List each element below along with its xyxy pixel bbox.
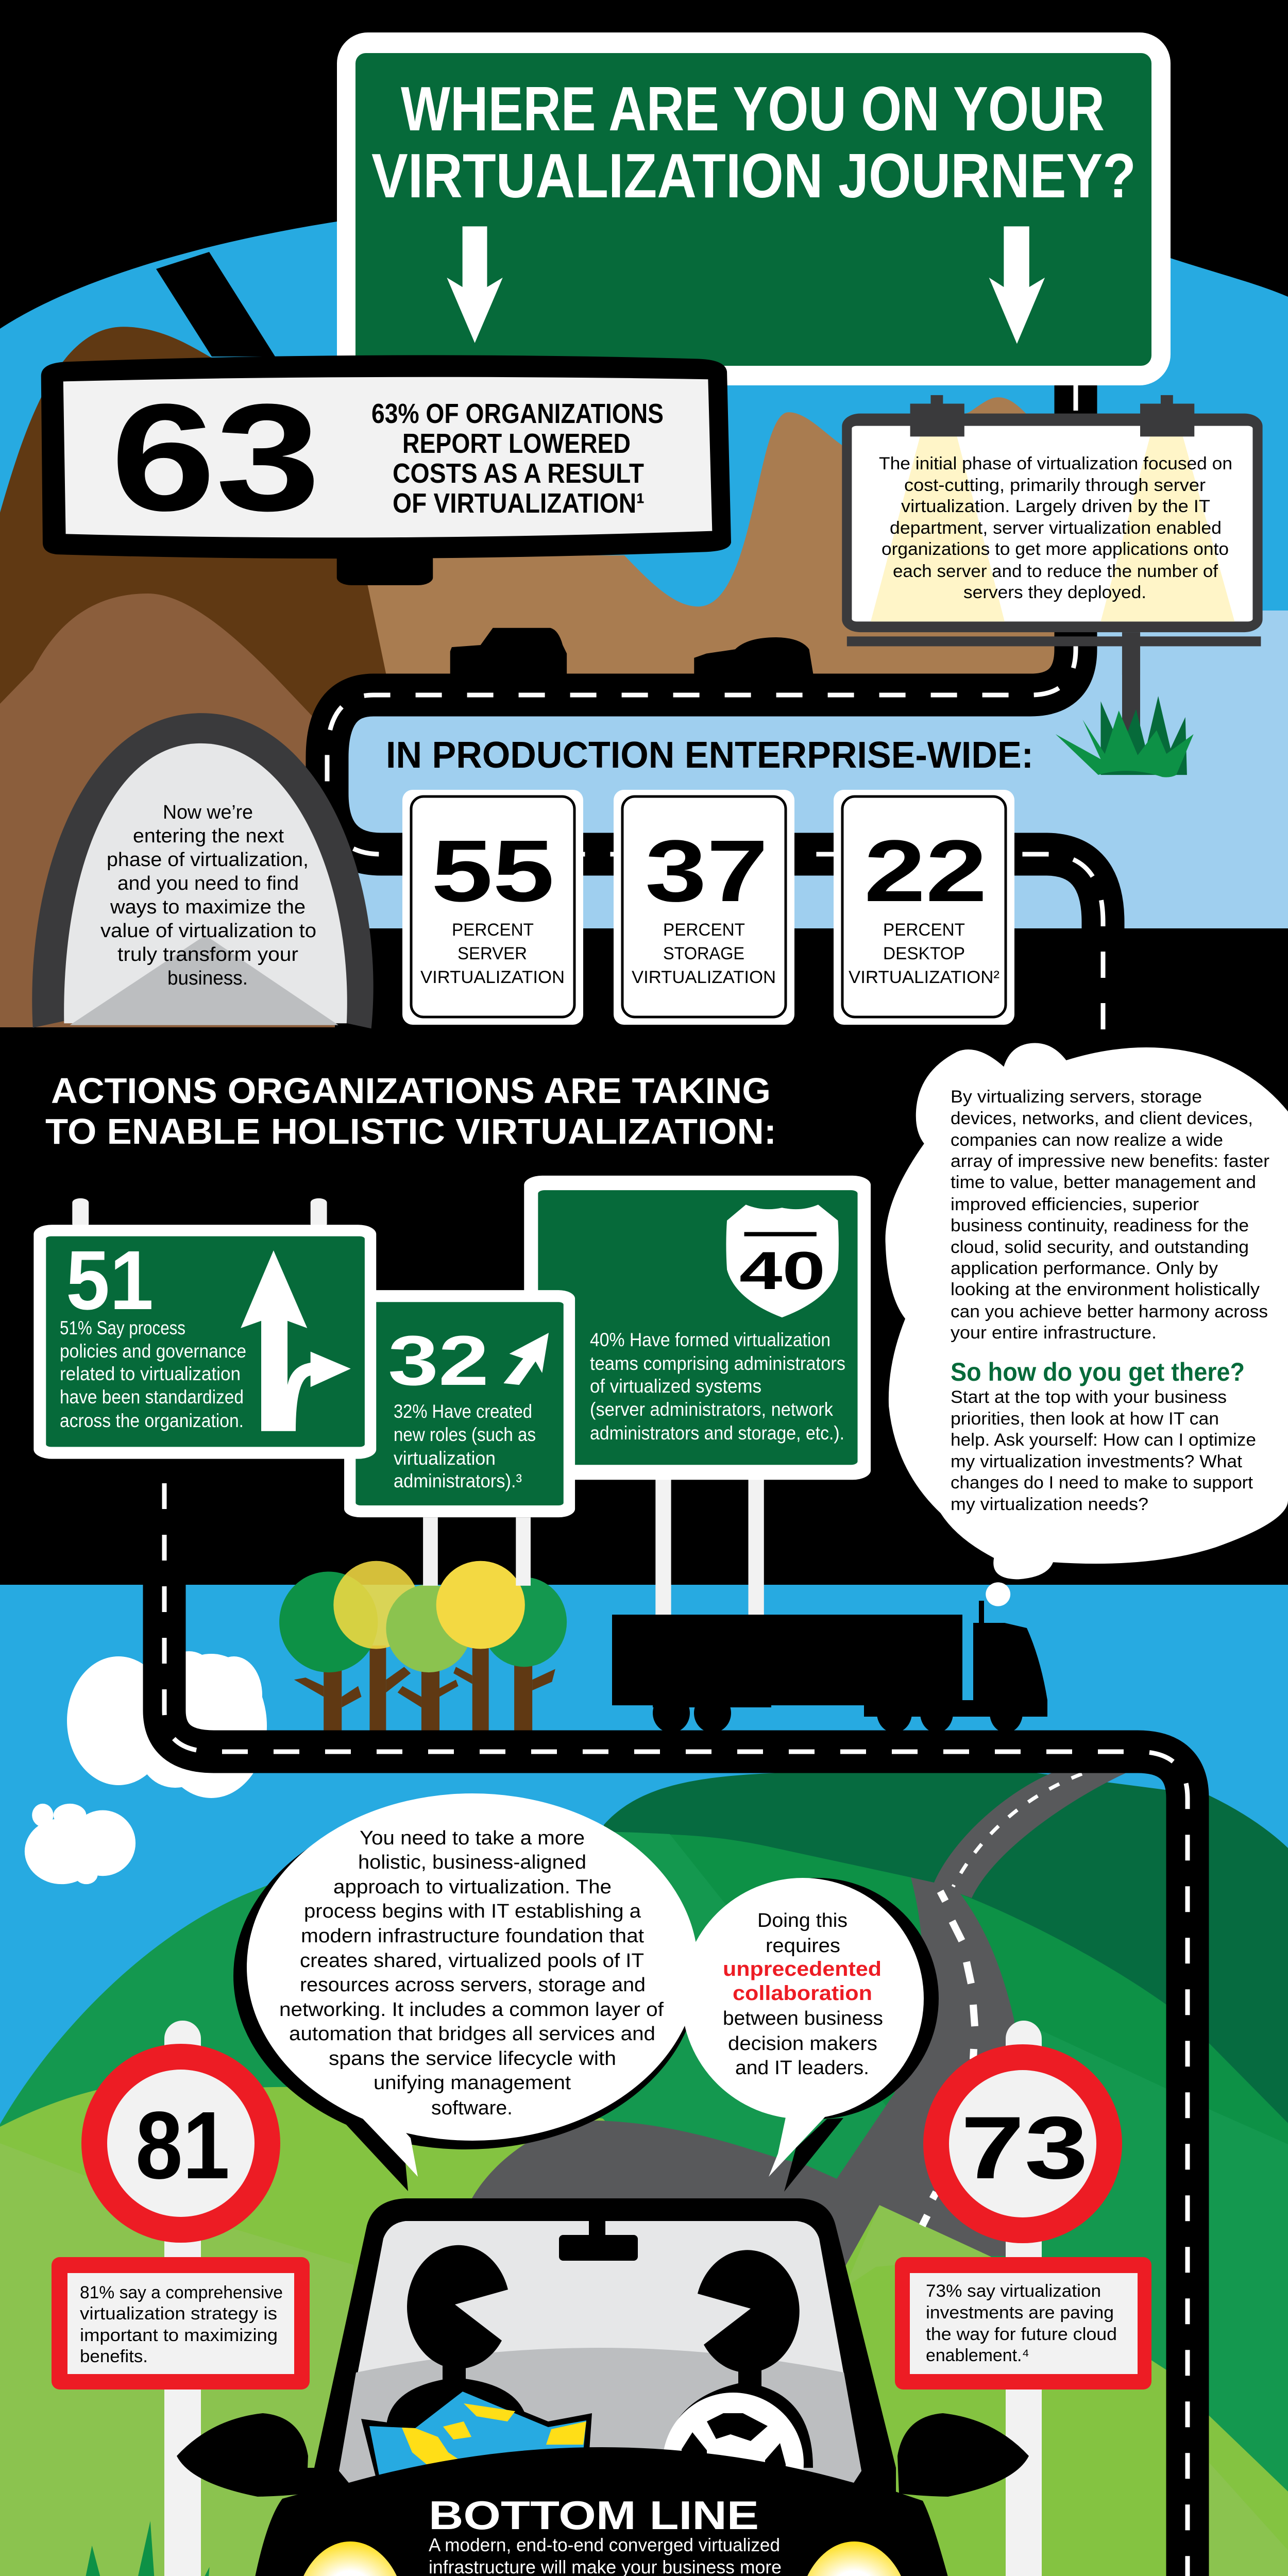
tunnel text: business. [167,968,248,989]
callout: 73 percent: the way for future cloud [926,2325,1117,2344]
cloud text: help. Ask yourself: How can I optimize [951,1430,1256,1450]
speech bubble: collaboration [682,1878,939,2192]
speech bubble: holistic approach: process begins with IT establishing a [304,1901,641,1922]
cloud text: By virtualizing servers, storage [951,1087,1202,1107]
speech bubble: collaboration: between business [723,2008,883,2029]
icon: two down arrows [447,226,1045,344]
sign: 63 percent lowered costs: COSTS AS A RESULT [393,458,644,489]
heading: in production enterprise-wide: IN PRODUCTION ENTERPRISE-WIDE: [386,735,1033,776]
callout: 81 percent: virtualization strategy is [80,2304,277,2324]
speech bubble: holistic approach: automation that bridges all services and [289,2023,655,2045]
sign: 51 percent: across the organization. [60,1410,244,1431]
cloud text: my virtualization needs? [951,1495,1148,1514]
speech bubble: holistic approach: spans the service lifecycle with [329,2048,616,2070]
tunnel text: value of virtualization to [100,920,316,942]
title: VIRTUALIZATION JOURNEY? [371,141,1136,211]
sign: 63 percent lowered costs [41,355,731,585]
grey road [277,1773,1126,2576]
speed sign 81 [52,2021,310,2576]
road: lower section [128,1483,1188,2576]
speech bubble: holistic approach: approach to virtualization. The [333,1876,612,1898]
panel: 22 percent desktop: DESKTOP [883,944,965,963]
panel: 22 percent desktop [834,790,1014,1025]
cloud text: devices, networks, and client devices, [951,1109,1253,1128]
text: bottom line [429,2534,782,2576]
callout: 73 percent: 73% say virtualization [926,2281,1101,2301]
speed sign 73 [895,2021,1151,2576]
callout: 73 percent: enablement.⁴ [926,2346,1029,2365]
sign: 51 percent: policies and governance [60,1341,246,1362]
sign: 32 percent: 32% Have created [394,1401,532,1422]
speech bubble: holistic approach [233,1793,698,2191]
sign: 40 percent: teams comprising administrators [590,1353,845,1374]
panel: 22 percent desktop: VIRTUALIZATION² [849,968,999,987]
sign: 40 percent [524,1176,871,1480]
icon: grass tuft [1056,696,1194,777]
green highway title sign [337,32,1171,385]
tunnel text: entering the next [133,825,284,847]
speech bubble: holistic approach: software. [431,2097,513,2119]
cloud text: your entire infrastructure. [951,1323,1157,1343]
panel: 55 percent server: SERVER [457,944,527,963]
panel: 55 percent server [402,790,583,1025]
icon: diagonal arrow [503,1333,549,1385]
panel: 55 percent server: PERCENT [452,920,534,940]
cloud text: changes do I need to make to support [951,1473,1253,1493]
panel: 37 percent storage: 37 [645,822,768,920]
icon: fork arrow [241,1250,351,1431]
billboard text: virtualization. Largely driven by the IT [901,497,1210,516]
speech bubble: holistic approach: resources across servers, storage and [300,1974,646,1996]
billboard text: organizations to get more applications onto [882,539,1229,559]
sign: 32 percent: new roles (such as [394,1424,536,1445]
side mirrors [177,2413,1029,2497]
sign: 51 percent: related to virtualization [60,1363,241,1384]
cloud text: can you achieve better harmony across [951,1302,1268,1321]
sign posts [72,1198,764,1616]
cloud text: improved efficiencies, superior [951,1195,1199,1214]
sign: 32 percent: virtualization [394,1448,496,1469]
billboard text: servers they deployed. [963,583,1146,602]
sign: 40 percent: (server administrators, network [590,1399,833,1420]
cloud text: looking at the environment holistically [951,1280,1260,1299]
cloud text: So how do you get there? [951,1358,1245,1386]
passengers [387,2245,813,2468]
cloud text: companies can now realize a wide [951,1130,1223,1150]
billboard text [879,454,1232,602]
speech bubble: holistic approach: You need to take a more [360,1827,585,1849]
tunnel text: truly transform your [117,944,298,965]
icon: map [361,2386,592,2478]
tunnel text: Now we’re [163,802,253,823]
sign: 40 percent: 40% Have formed virtualization [590,1329,831,1350]
sign: 63 percent lowered costs: OF VIRTUALIZATION¹ [393,488,645,519]
callout: 81 percent: 81% say a comprehensive [80,2283,283,2302]
sign: 51 percent: 51 [66,1233,154,1327]
windshield frame [314,2198,896,2494]
sign: 32 percent: 32 [388,1321,489,1400]
billboard text: each server and to reduce the number of [893,562,1218,581]
billboard text: cost-cutting, primarily through server [904,476,1206,495]
sign: 63 percent lowered costs: 63% OF ORGANIZATIONS [371,398,664,429]
callout: 81 percent: important to maximizing [80,2326,278,2345]
panel: 55 percent server: VIRTUALIZATION [420,968,565,987]
trees [279,1561,567,1748]
icon: interstate shield [726,1205,839,1317]
tunnel text: and you need to find [117,873,299,894]
car body [247,2447,959,2576]
tunnel text: phase of virtualization, [107,849,309,871]
rear-view mirror [559,2221,638,2261]
panel: 37 percent storage: PERCENT [663,920,745,940]
cloud text [951,1087,1269,1514]
heading: bottom line: BOTTOM LINE [429,2493,759,2538]
heading: actions organizations are taking [45,1071,776,1151]
road: upper section [327,384,1103,1082]
cloud text: priorities, then look at how IT can [951,1409,1219,1429]
speech bubble: collaboration: Doing this [757,1910,848,1931]
cloud text: time to value, better management and [951,1173,1256,1192]
billboard [842,395,1263,752]
speed sign 73: 73 [961,2098,1088,2197]
sign: 63 percent lowered costs: 63 [111,372,320,543]
speech bubble: holistic approach: unifying management [374,2072,571,2094]
clouds in sky [25,1651,267,1884]
sign: 51 percent: 51% Say process [60,1317,185,1338]
thought cloud [885,1043,1288,1606]
cloud text: array of impressive new benefits: faster [951,1151,1269,1171]
cloud text: cloud, solid security, and outstanding [951,1238,1249,1257]
sign: 40 percent: of virtualized systems [590,1376,761,1397]
cloud text: Start at the top with your business [951,1387,1227,1407]
title [371,74,1136,211]
speech bubble: holistic approach: networking. It includes a common layer of [279,1999,664,2021]
panel: 55 percent server: 55 [431,822,554,920]
icon: headlights [298,2541,906,2576]
title: WHERE ARE YOU ON YOUR [401,74,1105,144]
sign: 40 percent: 40 [739,1241,825,1301]
panel: 22 percent desktop: 22 [864,822,987,920]
tunnel text [100,802,316,989]
speech bubble: collaboration: requires [766,1935,840,1957]
icon: steering wheel [663,2393,804,2534]
callout: 73 percent [926,2281,1117,2365]
speech bubble: collaboration: decision makers [728,2033,877,2055]
sign: 40 percent: administrators and storage, etc.). [590,1422,844,1444]
left grass and lower band [0,2521,1288,2576]
sign: 51 percent: have been standardized [60,1386,244,1408]
car [177,2198,1029,2576]
hills and grey road [0,1772,1288,2576]
tunnel text: ways to maximize the [110,896,306,918]
cars on road [450,628,813,674]
speech bubble: holistic approach: modern infrastructure foundation that [301,1925,644,1947]
sign: 63 percent lowered costs: REPORT LOWERED [402,428,631,459]
panel: 37 percent storage: VIRTUALIZATION [632,968,776,987]
sign: 32 percent: administrators).³ [394,1470,522,1492]
billboard text: The initial phase of virtualization focused on [879,454,1232,473]
speech bubble: collaboration: unprecedented [723,1958,882,1980]
heading: actions organizations are taking: ACTIONS ORGANIZATIONS ARE TAKING [51,1071,771,1111]
heading: actions organizations are taking: TO ENABLE HOLISTIC VIRTUALIZATION: [45,1111,776,1151]
speed sign 81: 81 [135,2092,230,2199]
text: bottom line: A modern, end-to-end converged virtualized [429,2534,780,2555]
sign: 32 percent [344,1290,575,1517]
cloud text: application performance. Only by [951,1259,1218,1278]
mountains [0,327,1068,1027]
panel: 22 percent desktop: PERCENT [883,920,965,940]
truck [612,1601,1047,1733]
speech bubble: collaboration: collaboration [733,1982,872,2005]
callout: 73 percent: investments are paving [926,2303,1114,2323]
tunnel [32,713,374,1028]
panel: 37 percent storage: STORAGE [663,944,744,963]
callout: 81 percent [80,2283,283,2366]
speech bubble: holistic approach: creates shared, virtualized pools of IT [300,1950,644,1972]
cloud text: business continuity, readiness for the [951,1216,1249,1235]
panel: 37 percent storage [614,790,794,1025]
billboard text: department, server virtualization enabled [890,518,1222,538]
callout: 81 percent: benefits. [80,2347,148,2366]
sign: 51 percent [33,1225,376,1459]
cloud text: my virtualization investments? What [951,1452,1243,1471]
speech bubble: holistic approach: holistic, business-aligned [358,1852,586,1873]
speech bubble: collaboration: and IT leaders. [735,2057,869,2079]
